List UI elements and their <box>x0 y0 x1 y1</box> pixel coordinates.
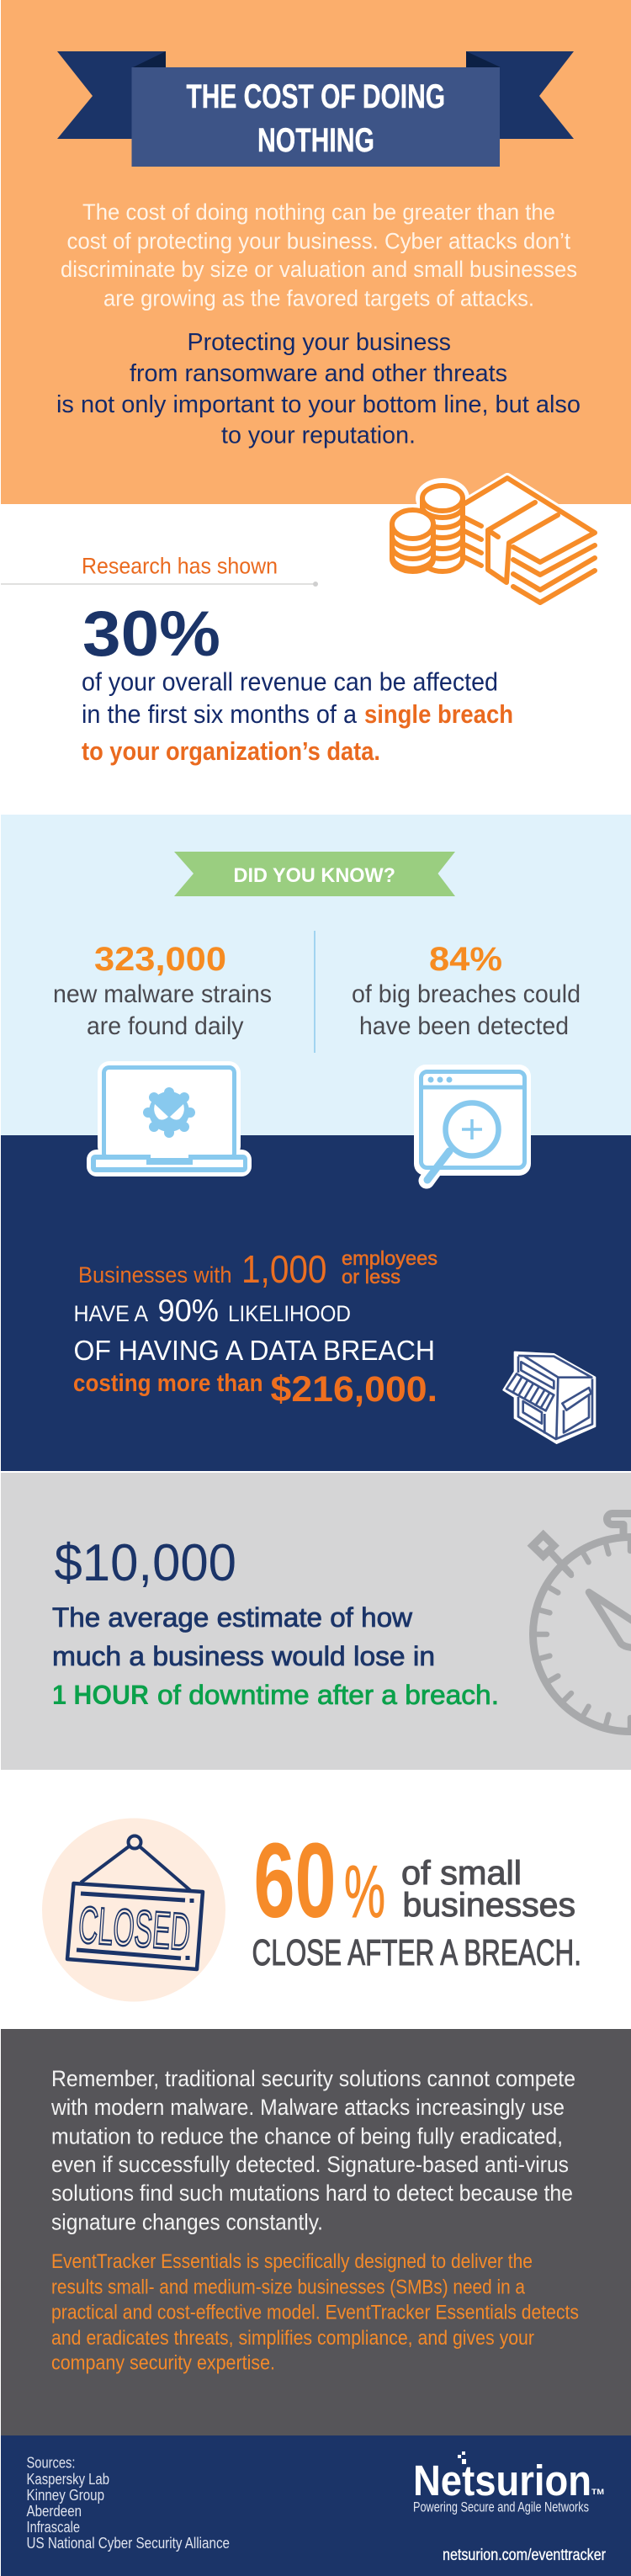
downtime text: The average estimate of how <box>52 1602 413 1633</box>
white paragraph: with modern malware. Malware attacks increasingly use <box>50 2095 565 2120</box>
sign text: CLOSED <box>77 1896 192 1962</box>
revenue text <box>82 667 513 766</box>
protecting paragraph: is not only important to your bottom line, but also <box>56 391 581 418</box>
panel: research stat <box>1 554 513 766</box>
icon: laptop with malware <box>87 1061 252 1176</box>
line: 90 percent likelihood: OF HAVING A DATA BREACH <box>74 1335 435 1366</box>
line: 90 percent likelihood: LIKELIHOOD <box>228 1301 351 1326</box>
line: businesses with 1,000: or less <box>342 1266 400 1288</box>
panel: business likelihood <box>1 1135 631 1471</box>
line: businesses with 1,000: Businesses with <box>78 1262 232 1288</box>
icon: stopwatch <box>533 1513 631 1732</box>
line: 90 percent likelihood: 90% <box>158 1293 219 1328</box>
stat: malware strains: 323,000 <box>94 941 226 978</box>
sources: Kaspersky Lab <box>27 2470 109 2488</box>
intro paragraph: cost of protecting your business. Cyber attacks don’t <box>67 229 570 254</box>
line: businesses with 1,000: 1,000 <box>241 1247 326 1291</box>
protecting paragraph: Protecting your business <box>187 329 451 356</box>
downtime text: much a business would lose in <box>52 1641 435 1671</box>
orange paragraph <box>51 2250 579 2375</box>
panel: footer <box>1 2435 631 2576</box>
protecting paragraph: from ransomware and other threats <box>130 360 507 387</box>
white paragraph <box>50 2066 575 2235</box>
sources: Kinney Group <box>27 2486 104 2504</box>
intro paragraph <box>61 199 577 311</box>
orange paragraph: and eradicates threats, simplifies compliance, and gives your <box>51 2327 534 2350</box>
stat: malware strains <box>53 941 272 1040</box>
small businesses text <box>401 1855 575 1924</box>
stat: big breaches <box>352 941 581 1040</box>
intro paragraph: are growing as the favored targets of attacks. <box>103 286 534 311</box>
line: businesses with 1,000 <box>78 1247 437 1291</box>
stat: big breaches: 84% <box>429 941 502 978</box>
small businesses text: of small <box>401 1855 522 1892</box>
line: cost: $216,000. <box>271 1369 437 1410</box>
white paragraph: Remember, traditional security solutions cannot compete <box>51 2066 575 2091</box>
60 percent: % <box>344 1850 385 1933</box>
website: netsurion.com/eventtracker <box>443 2547 607 2564</box>
sources: Infrascale <box>27 2518 80 2536</box>
intro paragraph: The cost of doing nothing can be greater than the <box>82 199 555 225</box>
downtime text <box>52 1602 499 1710</box>
panel: remember <box>1 2029 631 2435</box>
logo: Netsurion: TM <box>591 2488 604 2496</box>
icon: malware bug <box>143 1087 195 1138</box>
sources: Aberdeen <box>27 2502 82 2520</box>
sources: US National Cyber Security Alliance <box>27 2534 230 2552</box>
line: cost <box>73 1369 437 1410</box>
orange paragraph: company security expertise. <box>51 2351 275 2375</box>
white paragraph: mutation to reduce the chance of being fully eradicated, <box>51 2124 563 2149</box>
line: businesses with 1,000: employees <box>342 1247 437 1269</box>
downtime text: 1 HOUR <box>52 1680 149 1710</box>
sources <box>27 2454 230 2552</box>
30 percent: 30% <box>82 598 220 670</box>
60 percent: 60 <box>254 1821 337 1940</box>
white paragraph: signature changes constantly. <box>51 2210 323 2235</box>
green banner <box>174 852 455 896</box>
icon: browser window with magnifier <box>414 1065 531 1181</box>
intro paragraph: discriminate by size or valuation and small businesses <box>61 257 577 282</box>
panel: intro <box>1 0 631 504</box>
green banner: DID YOU KNOW? <box>234 864 395 887</box>
icon: storefront <box>503 1352 595 1443</box>
downtime text: of downtime after a breach. <box>157 1680 499 1710</box>
title: THE COST OF DOING <box>187 78 445 115</box>
orange paragraph: results small- and medium-size businesses (SMBs) need in a <box>51 2276 526 2299</box>
icon: coins and money <box>392 478 595 603</box>
stat: big breaches: of big breaches could <box>352 980 581 1008</box>
title <box>187 78 445 159</box>
title ribbon <box>57 51 574 167</box>
line: 90 percent likelihood: HAVE A <box>74 1301 148 1326</box>
panel: closed businesses <box>42 1818 581 2001</box>
revenue text: single breach <box>364 699 513 729</box>
logo: Netsurion: Netsurion <box>413 2456 591 2504</box>
research label: Research has shown <box>82 554 278 579</box>
revenue text: in the first six months of a <box>82 699 358 729</box>
white paragraph: solutions find such mutations hard to detect because the <box>51 2180 573 2206</box>
orange paragraph: EventTracker Essentials is specifically designed to deliver the <box>51 2250 533 2273</box>
revenue text: to your organization’s data. <box>82 736 380 766</box>
panel: did you know <box>1 815 631 1135</box>
protecting paragraph: to your reputation. <box>221 422 416 449</box>
protecting paragraph <box>56 329 581 449</box>
icon: closed sign <box>42 1818 225 2001</box>
stat: malware strains: new malware strains <box>53 980 272 1008</box>
panel: downtime cost <box>1 1473 631 1770</box>
white paragraph: even if successfully detected. Signature-based anti-virus <box>51 2152 569 2177</box>
stat: malware strains: are found daily <box>87 1012 244 1040</box>
small businesses text: businesses <box>402 1887 575 1924</box>
line: cost: costing more than <box>73 1370 262 1397</box>
10,000 dollars: $10,000 <box>54 1534 236 1592</box>
revenue text: of your overall revenue can be affected <box>82 667 498 697</box>
sources: Sources: <box>27 2454 76 2471</box>
stat: big breaches: have been detected <box>359 1012 569 1040</box>
line: 90 percent likelihood <box>74 1293 435 1366</box>
title: NOTHING <box>257 122 374 159</box>
